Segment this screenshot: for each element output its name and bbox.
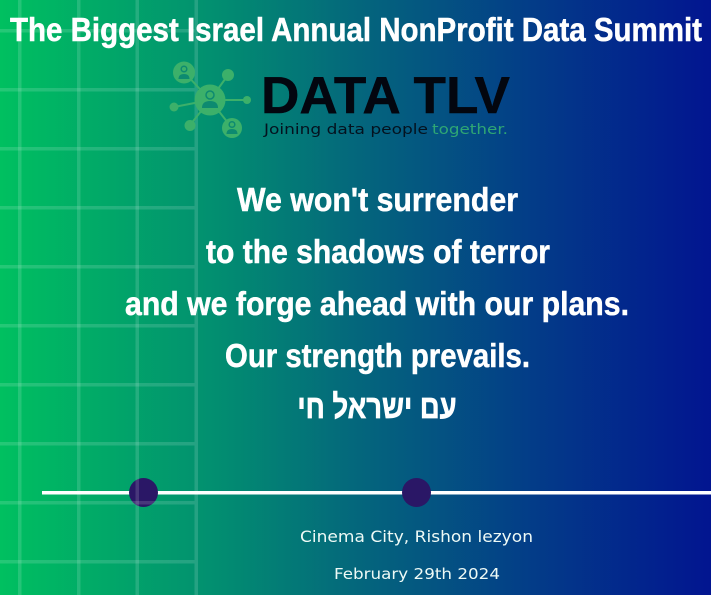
icon: data people network (170, 62, 251, 138)
venue: Cinema City, Rishon lezyon (300, 527, 533, 546)
main message: We won't surrender (237, 181, 518, 218)
logo tagline (263, 122, 508, 138)
timeline (42, 478, 711, 507)
main message: Our strength prevails. (225, 337, 530, 374)
main message: and we forge ahead with our plans. (125, 285, 629, 322)
logo wordmark: DATA TLV (261, 67, 510, 125)
date: February 29th 2024 (334, 565, 500, 583)
logo tagline: together. (432, 122, 508, 138)
main message: עם ישראל חי (297, 390, 457, 426)
logo tagline: Joining data people (263, 122, 428, 138)
background grid (0, 0, 198, 595)
logo: DATA TLV (170, 62, 510, 138)
main message: to the shadows of terror (206, 233, 550, 270)
main message (125, 181, 629, 426)
